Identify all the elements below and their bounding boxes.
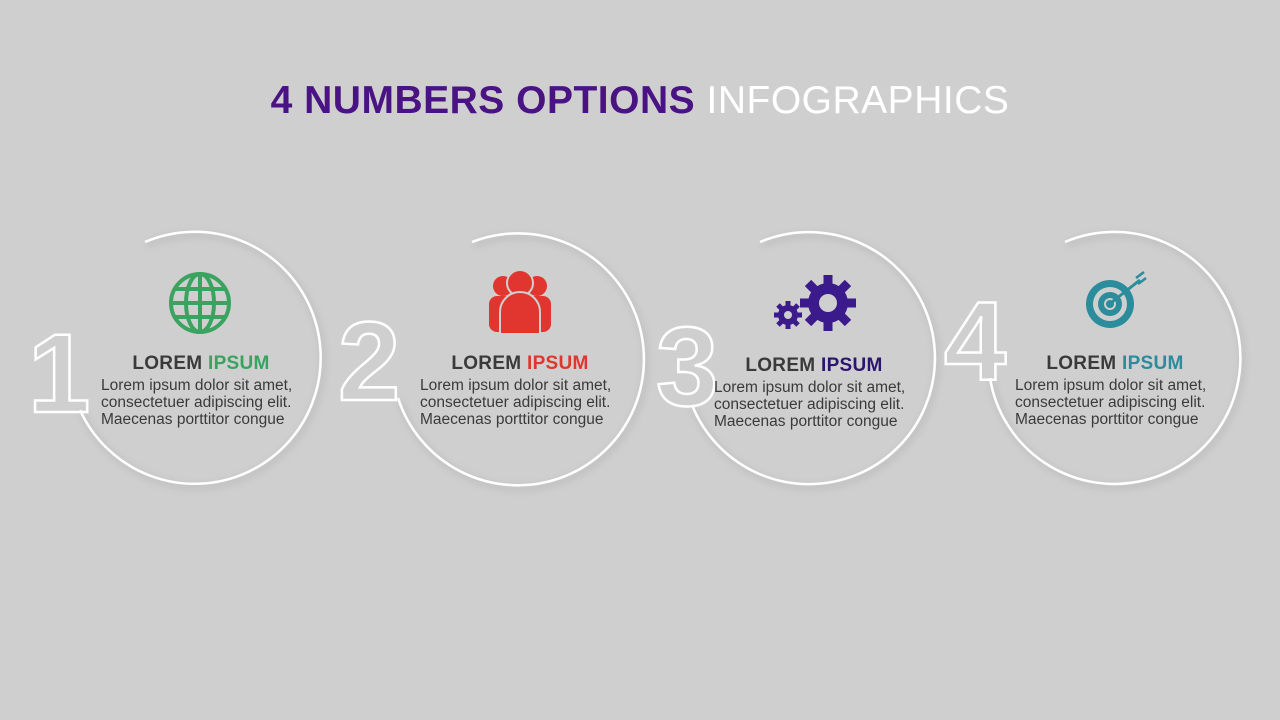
text block 4: LOREM IPSUM [1046,353,1184,374]
digits: 4 [944,279,1006,404]
text block 1: consectetuer adipiscing elit. [101,394,291,411]
icon: people [489,270,551,334]
text block 3: consectetuer adipiscing elit. [714,396,904,413]
text block 2 [420,353,611,428]
text block 3: Lorem ipsum dolor sit amet, [714,379,905,396]
text block 4: Maecenas porttitor congue [1015,411,1199,428]
panel 1 shape [80,232,1240,485]
icon: target [1086,272,1146,328]
text block 3: Maecenas porttitor congue [714,413,898,430]
text block 1: LOREM IPSUM [132,353,270,374]
text block 2: consectetuer adipiscing elit. [420,394,610,411]
text block 1: Maecenas porttitor congue [101,411,285,428]
text block 4: Lorem ipsum dolor sit amet, [1015,377,1206,394]
title: 4 NUMBERS OPTIONS INFOGRAPHICS [271,79,1009,122]
text block 4 [1015,353,1206,428]
digits [28,279,1006,436]
digits: 1 [28,311,90,436]
text block 3: LOREM IPSUM [745,355,883,376]
digits: 3 [656,304,718,429]
text block 2: LOREM IPSUM [451,353,589,374]
text block 2: Maecenas porttitor congue [420,411,604,428]
text block 3 [714,355,905,430]
text block 1: Lorem ipsum dolor sit amet, [101,377,292,394]
icon: gears [774,275,856,331]
text block 4: consectetuer adipiscing elit. [1015,394,1205,411]
digits: 2 [338,299,400,424]
text block 2: Lorem ipsum dolor sit amet, [420,377,611,394]
icon: globe [171,274,229,332]
text block 1 [101,353,292,428]
